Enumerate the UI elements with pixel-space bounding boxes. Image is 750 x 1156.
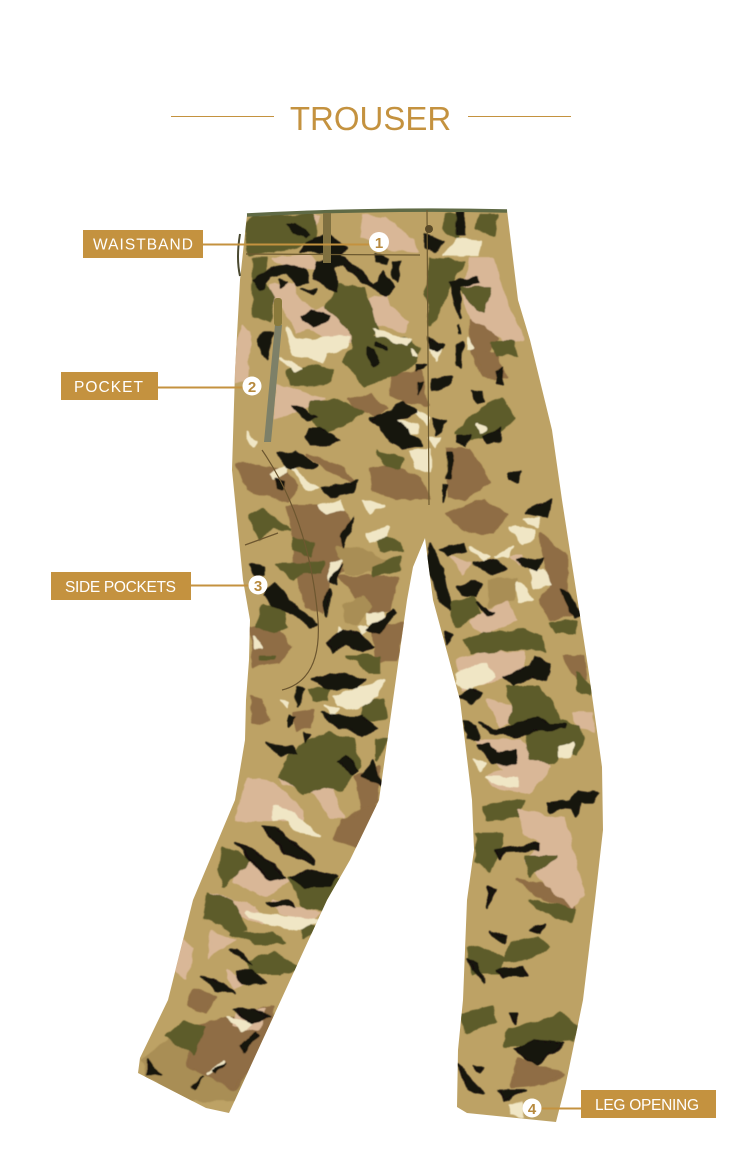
upper camo pattern — [233, 212, 523, 502]
callout: pocket: POCKET — [74, 379, 144, 396]
callout: leg opening — [522, 1090, 716, 1118]
callout: waistband: 1 — [375, 235, 383, 252]
waistband — [238, 210, 507, 505]
callout: side pockets — [51, 572, 268, 600]
middle camo pattern — [237, 500, 600, 820]
callout: side pockets: 3 — [254, 578, 262, 595]
callout: waistband — [83, 230, 389, 258]
callout: pocket: 2 — [248, 379, 256, 396]
lower camo pattern — [143, 803, 584, 1117]
callout: leg opening: 4 — [528, 1101, 537, 1118]
callout: leg opening: LEG OPENING — [595, 1097, 699, 1114]
pocket zipper — [264, 298, 282, 442]
side pocket seam — [245, 450, 318, 690]
camouflage trousers — [130, 200, 610, 1130]
callout: waistband: WAISTBAND — [93, 236, 193, 254]
callout: side pockets: SIDE POCKETS — [65, 579, 176, 596]
title: TROUSER — [290, 100, 451, 137]
callout: pocket — [61, 372, 262, 400]
